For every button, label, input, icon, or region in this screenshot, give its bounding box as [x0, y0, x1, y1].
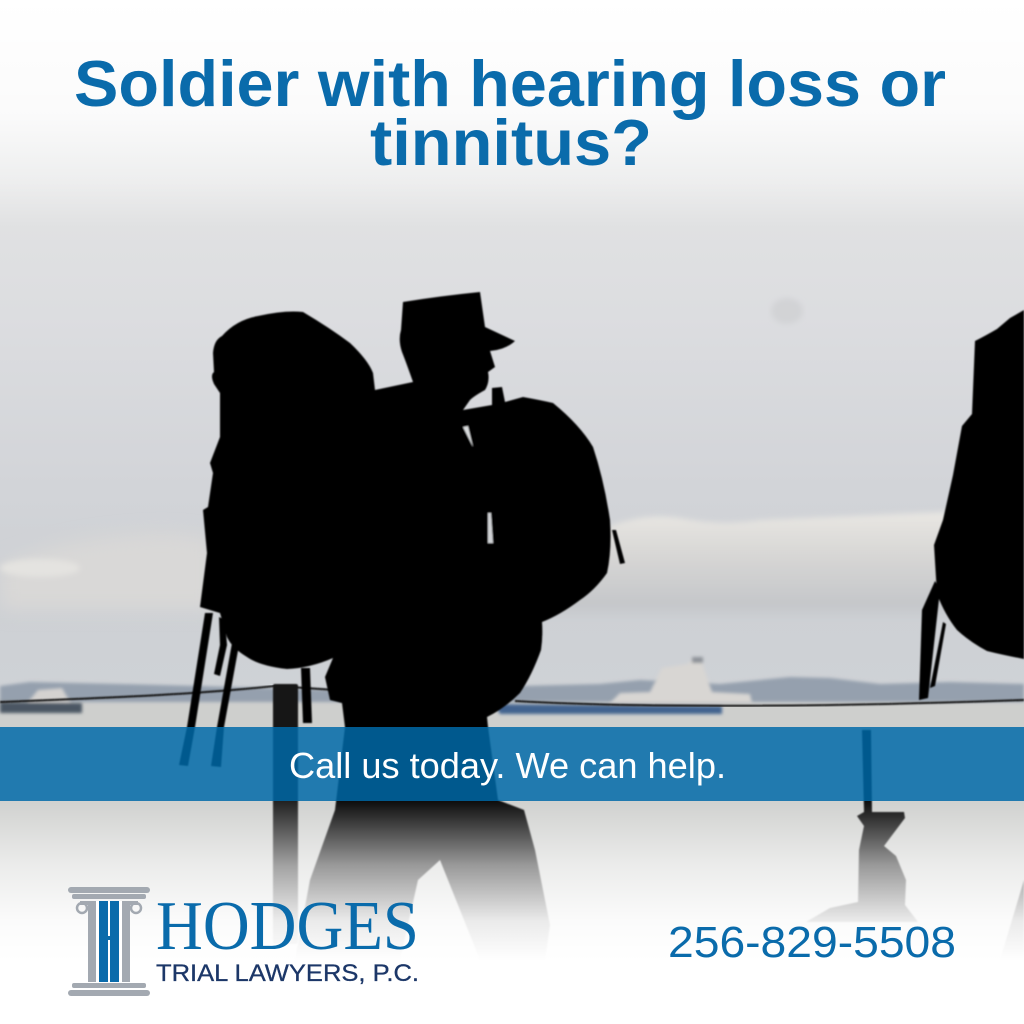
rifle [806, 730, 918, 922]
rope [0, 686, 1024, 706]
icon: pillar [68, 887, 150, 996]
sky background [0, 0, 1024, 700]
call-to-action banner [0, 727, 1024, 801]
logo subtitle: TRIAL LAWYERS, P.C. [156, 960, 419, 987]
title: Soldier with hearing loss or [74, 47, 946, 120]
distant hills [0, 677, 1024, 702]
logo wordmark: HODGES [156, 888, 419, 965]
top white fade [0, 0, 1024, 228]
title [74, 47, 946, 179]
water [0, 698, 1024, 1024]
title: tinnitus? [370, 106, 652, 179]
right-hand soldier pack [934, 310, 1024, 659]
post [273, 684, 298, 944]
gaps between arm and pack [463, 426, 473, 447]
bottom white fade [0, 801, 1024, 961]
logo: Hodges Trial Lawyers [68, 887, 419, 996]
ships [0, 657, 752, 714]
call-to-action banner: Call us today. We can help. [289, 745, 726, 786]
silhouette: soldier with packs [179, 292, 1024, 960]
left pack straps [179, 613, 213, 766]
clouds [0, 298, 1024, 622]
phone number: 256-829-5508 [668, 918, 956, 967]
